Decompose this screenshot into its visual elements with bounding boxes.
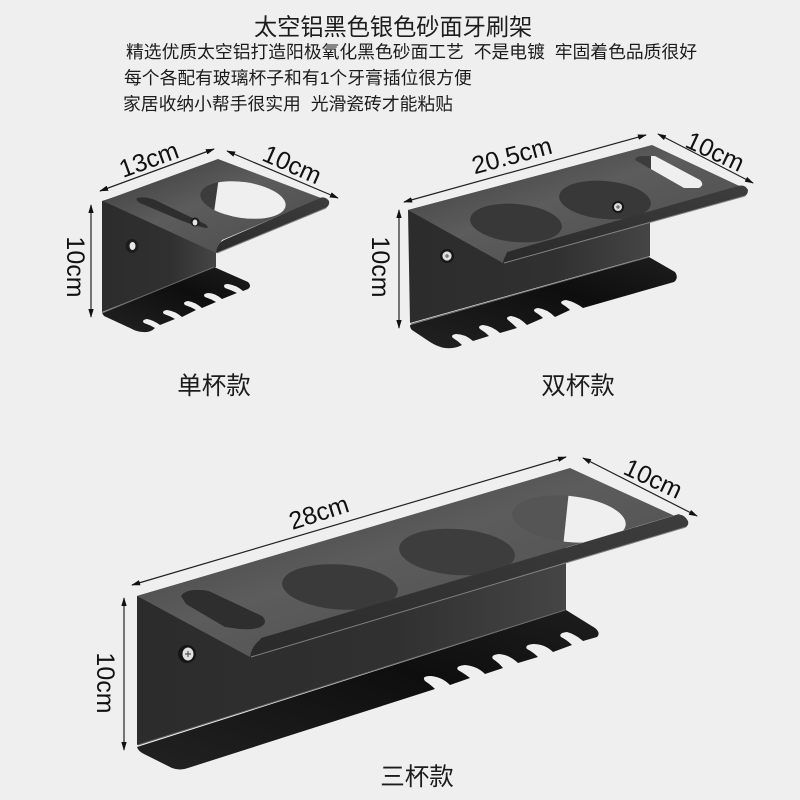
dimension: 10cm depth: 10cm xyxy=(681,126,749,178)
front lip xyxy=(216,197,329,253)
top plate xyxy=(103,159,329,253)
screws xyxy=(126,218,200,253)
lower shelf with slots xyxy=(137,610,599,770)
description text block: 家居收纳小帮手很实用 光滑瓷砖才能粘贴 xyxy=(123,94,453,114)
dimension: 20.5cm xyxy=(404,132,646,202)
dimension: 20.5cm: 20.5cm xyxy=(469,132,555,180)
dimension: 10cm depth xyxy=(583,453,697,516)
lower shelf with slots xyxy=(102,267,250,332)
dimension: 10cm depth xyxy=(658,126,753,183)
description text block: 精选优质太空铝打造阳极氧化黑色砂面工艺 不是电镀 牢固着色品质很好 xyxy=(126,42,697,62)
dimension: 28cm: 28cm xyxy=(286,490,352,536)
dimension: 10cm height: 10cm xyxy=(61,236,89,298)
product: single cup holder xyxy=(61,136,338,400)
product: triple cup holder xyxy=(91,453,697,791)
wall panel xyxy=(102,165,216,312)
cup hole 2 xyxy=(558,177,652,223)
toothpaste slot xyxy=(181,590,265,629)
lower shelf with slots xyxy=(410,257,677,348)
dimension: 10cm depth: 10cm xyxy=(258,140,326,190)
wall panel xyxy=(137,470,566,745)
cup hole 1 xyxy=(281,561,399,613)
screw xyxy=(178,645,196,663)
label: single cup: 单杯款 xyxy=(177,372,251,400)
dimension: 10cm height: 10cm xyxy=(366,236,394,298)
dimension: 13cm xyxy=(100,136,214,191)
dimension: 10cm height xyxy=(61,205,91,317)
description text block xyxy=(123,42,697,114)
dimension: 10cm height: 10cm xyxy=(91,652,119,714)
toothpaste slot xyxy=(635,156,702,188)
product: double cup holder xyxy=(366,126,753,400)
dimension: 28cm xyxy=(132,457,566,585)
cup hole 3 xyxy=(564,496,626,543)
dimension: 13cm: 13cm xyxy=(115,136,183,184)
dimension: 10cm depth: 10cm xyxy=(619,453,687,505)
front lip xyxy=(250,515,688,657)
title: 太空铝黑色银色砂面牙刷架 xyxy=(254,14,532,40)
dimension: 10cm height xyxy=(366,210,399,328)
front lip xyxy=(503,186,748,263)
description text block: 每个各配有玻璃杯子和有1个牙膏插位很方便 xyxy=(124,67,472,88)
label: double cup: 双杯款 xyxy=(541,372,615,400)
label: triple cup: 三杯款 xyxy=(380,763,454,791)
dimension: 10cm depth xyxy=(227,140,338,198)
cup hole xyxy=(200,181,286,219)
top plate xyxy=(408,145,748,263)
toothpaste slot xyxy=(136,197,208,228)
top plate xyxy=(137,468,688,657)
cup hole 1 xyxy=(469,200,563,246)
screws xyxy=(440,201,624,263)
cup hole 2 xyxy=(398,525,516,579)
wall panel xyxy=(408,146,650,323)
